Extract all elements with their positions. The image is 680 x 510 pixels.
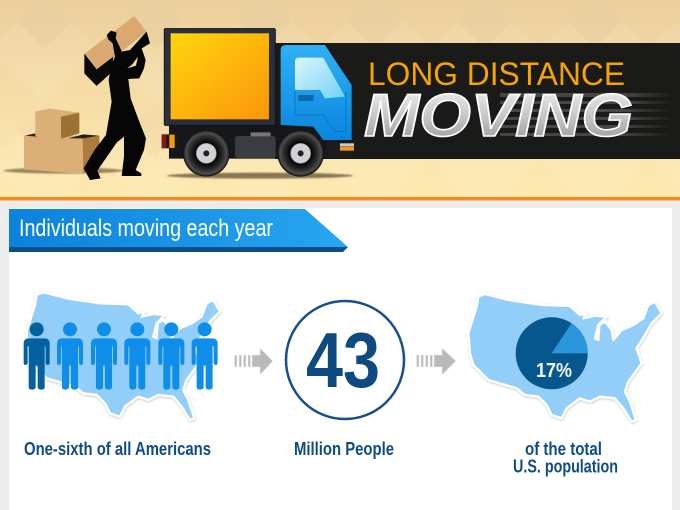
illustration: boxes and man	[3, 16, 150, 180]
panel: individuals moving	[9, 208, 672, 510]
illustration: truck	[162, 29, 354, 179]
bumper	[327, 141, 354, 158]
front wheel	[277, 130, 324, 177]
arrow one	[234, 348, 273, 375]
tail light	[162, 134, 178, 148]
cab	[281, 45, 352, 140]
label: million people: Million People	[294, 439, 394, 459]
ground shadow	[3, 168, 123, 174]
stacked boxes	[24, 109, 99, 174]
man silhouette	[84, 31, 150, 180]
left map	[27, 292, 220, 420]
map with people	[24, 292, 220, 420]
label: one-sixth: One-sixth of all Americans	[24, 439, 211, 459]
speed lines	[500, 93, 675, 136]
label: of the total: of the total	[525, 439, 602, 459]
label: us population: U.S. population	[513, 456, 618, 476]
right map	[468, 294, 662, 422]
chassis	[169, 124, 352, 159]
title: moving: MOVING	[364, 82, 633, 149]
section heading	[9, 209, 348, 252]
fuel tank	[235, 136, 276, 158]
stat circle	[286, 301, 404, 419]
cargo box	[164, 29, 275, 125]
header background	[0, 0, 680, 200]
pie chart: 17%	[536, 360, 572, 382]
carried box	[84, 16, 147, 86]
title: long distance: LONG DISTANCE	[368, 56, 625, 92]
arm gap	[127, 57, 138, 68]
pie chart	[516, 317, 588, 389]
stat circle: 43	[306, 316, 380, 404]
truck shadow	[167, 173, 353, 179]
arrow two	[416, 348, 456, 375]
rear wheel	[183, 130, 230, 177]
people row	[24, 322, 218, 390]
section heading: Individuals moving each year	[19, 215, 273, 242]
map with pie	[468, 294, 662, 422]
title banner	[275, 43, 680, 159]
